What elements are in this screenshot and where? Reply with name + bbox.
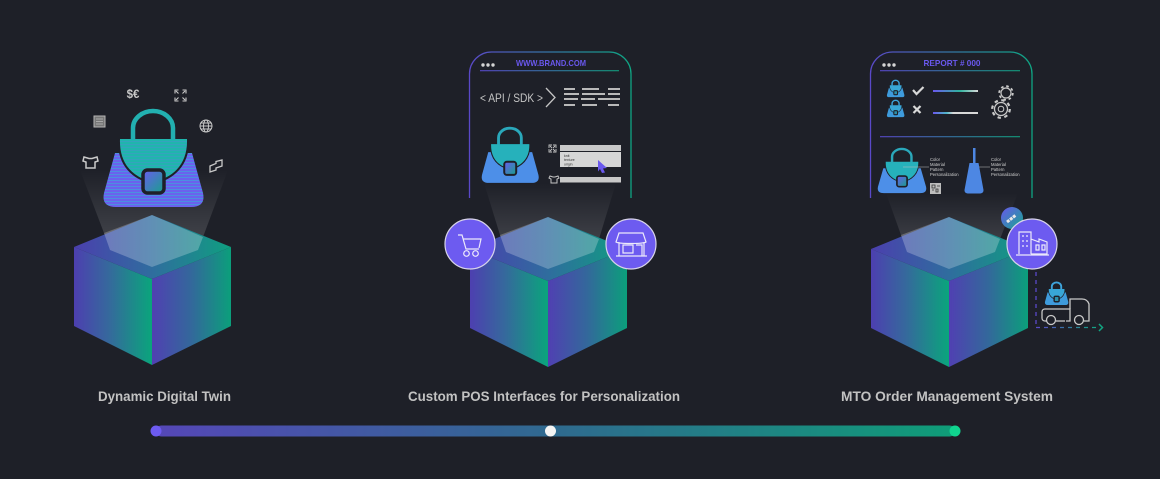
report heading: REPORT # 000 — [924, 58, 981, 68]
icon: cursor — [598, 160, 607, 173]
icon: store badge — [606, 219, 656, 269]
middle dot — [545, 426, 556, 436]
icon: swatch grid — [94, 116, 105, 127]
bag attribute text: Color — [991, 157, 1002, 162]
bag attribute text: Material — [930, 162, 945, 167]
icon: expand arrows — [175, 90, 186, 101]
form dropdown — [560, 145, 621, 182]
icon: cross — [914, 106, 920, 113]
icon: gears — [992, 86, 1013, 118]
small bag rows — [887, 80, 978, 117]
window dots — [882, 63, 896, 67]
start dot — [150, 426, 162, 436]
icon: check — [913, 87, 924, 94]
icon: currency: $€ — [127, 89, 140, 101]
projection beam 2 — [484, 183, 616, 269]
window dots — [481, 63, 495, 67]
url heading: WWW.BRAND.COM — [516, 58, 586, 68]
icon: large handbag — [878, 149, 926, 193]
chevron — [546, 88, 555, 107]
end dot — [950, 426, 960, 436]
bag attribute text: Pattern — [991, 167, 1005, 172]
projection beam 1 — [80, 170, 228, 267]
label: Custom POS Interfaces for Personalization — [408, 389, 680, 404]
projection beam 3 — [886, 193, 1018, 269]
bag attribute text: Personalization — [930, 172, 959, 177]
icon: shirt — [549, 176, 559, 183]
report window frame — [870, 52, 1032, 198]
icon: factory badge — [1007, 219, 1057, 269]
icon: qr code — [930, 183, 941, 194]
cube 2 — [470, 217, 627, 367]
code lines — [564, 88, 620, 106]
icon: t-shirt — [83, 157, 98, 168]
bag attribute text — [930, 157, 1020, 177]
bag attribute text: Material — [991, 162, 1006, 167]
bag attribute text: Pattern — [930, 167, 944, 172]
api sdk text: < API / SDK > — [480, 91, 543, 105]
icon: bottle — [964, 148, 984, 194]
icon: expand — [549, 145, 556, 152]
form dropdown: texture — [564, 158, 575, 162]
timeline progress bar — [150, 426, 960, 436]
icon: ruler — [210, 160, 222, 172]
panel: dynamic digital twin — [74, 89, 231, 404]
icon: cart badge — [445, 219, 495, 269]
icon: link badge — [1001, 207, 1023, 229]
delivery dashed axes — [1036, 272, 1102, 331]
icon: handbag — [482, 128, 539, 183]
panel: custom pos interfaces — [408, 52, 680, 404]
form dropdown: origin — [564, 162, 573, 166]
cube 1 — [74, 215, 231, 365]
label: Dynamic Digital Twin — [98, 389, 231, 404]
browser window frame — [470, 52, 631, 198]
icon: truck with bag — [1042, 282, 1089, 324]
icon: globe — [200, 120, 212, 132]
bag attribute text: Personalization — [991, 172, 1020, 177]
form dropdown: knit — [564, 154, 569, 158]
panel: mto order management — [841, 52, 1102, 404]
cube 3 — [871, 217, 1028, 367]
bag attribute text: Color — [930, 157, 941, 162]
icon: striped handbag — [104, 111, 204, 207]
label: MTO Order Management System — [841, 389, 1053, 404]
